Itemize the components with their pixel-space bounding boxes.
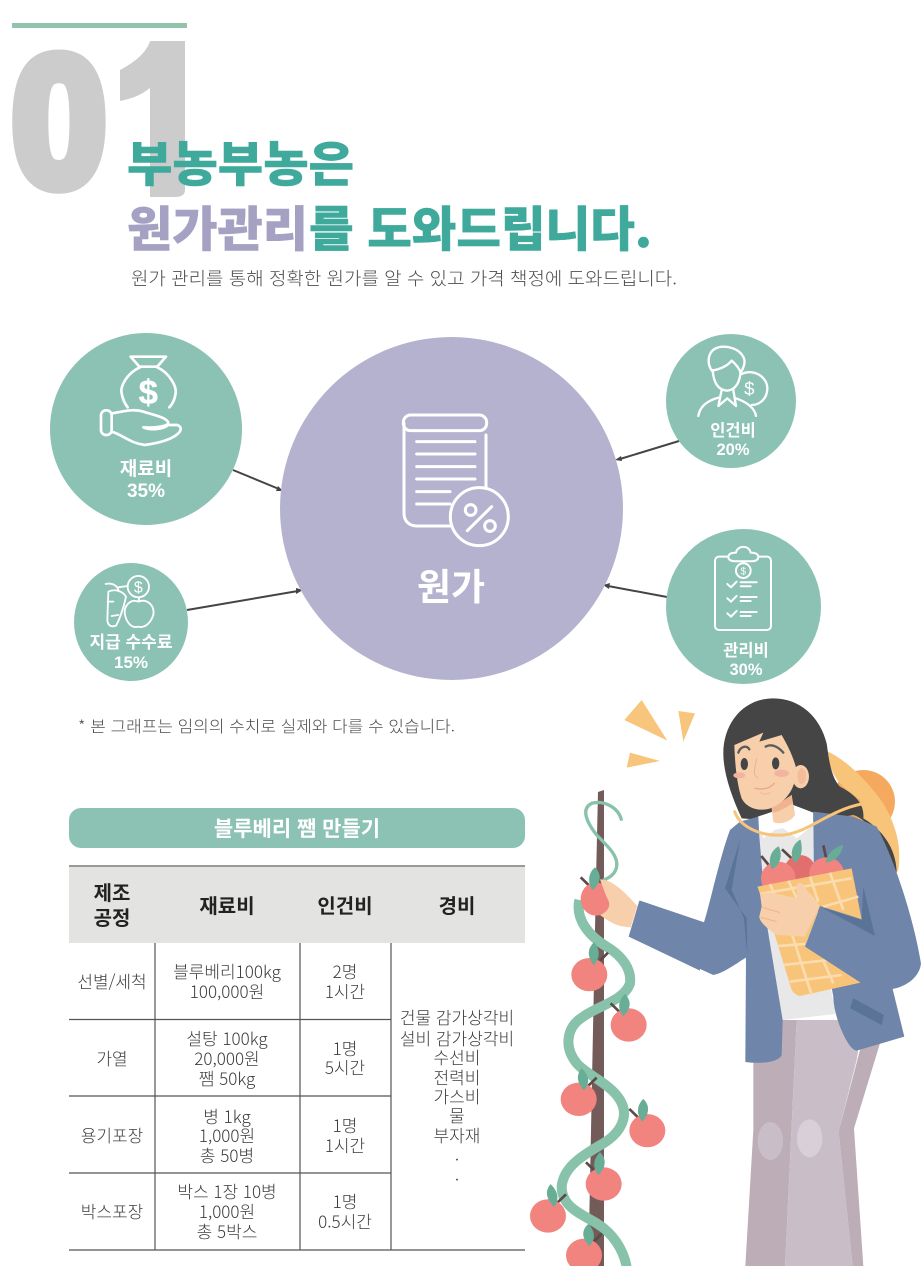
neck [772, 795, 795, 823]
apples [530, 868, 665, 1266]
shirt [759, 822, 835, 1020]
title: 원가관리 [127, 190, 308, 260]
subtitle: 원가 관리를 통해 정확한 원가를 알 수 있고 가격 책정에 도와드립니다. [131, 265, 677, 291]
label: material cost 35% [120, 458, 172, 502]
row: container packing: 총 50병 [200, 1142, 254, 1167]
row: container packing: 1,000원 [199, 1122, 255, 1147]
jacket [629, 812, 921, 1063]
label: labor cost 20%: 20% [716, 441, 750, 459]
hand on basket [759, 883, 819, 937]
column: overhead list: 수선비 [434, 1044, 480, 1069]
column: overhead list [400, 1004, 514, 1186]
hand on apple [600, 879, 700, 971]
panel: central cost circle [280, 337, 623, 680]
hat [827, 751, 899, 877]
table header: 인건비 [317, 890, 373, 919]
face [733, 733, 809, 810]
row: container packing: 용기포장 [81, 1122, 143, 1147]
label: payment fee 15%: 지급 수수료 [90, 633, 172, 652]
table heading bar: 블루베리 쨈 만들기 [214, 818, 380, 841]
label: management cost 30%: 30% [729, 661, 763, 679]
label: material cost 35%: 35% [127, 481, 165, 502]
label: labor cost 20%: 인건비 [710, 421, 756, 440]
section number 01 [12, 41, 185, 197]
necklace cord [735, 804, 862, 835]
section number 01: 1 [109, 10, 220, 233]
column: overhead list: . [455, 1141, 459, 1166]
table heading bar [69, 808, 525, 848]
label: labor cost 20% [710, 421, 756, 459]
table header: 재료비 [199, 890, 255, 919]
label: management cost 30%: 관리비 [723, 641, 769, 660]
row: sorting: 블루베리100kg [173, 958, 282, 983]
panel: payment fee [74, 563, 188, 681]
column: overhead list: 전력비 [434, 1064, 480, 1089]
table header: 제조 [94, 877, 130, 906]
row: heating: 가열 [96, 1045, 128, 1070]
row: sorting: 선별/세척 [77, 968, 147, 993]
label: management cost 30% [723, 641, 769, 679]
row: container packing: 병 1kg [203, 1103, 251, 1128]
icon: money bag on hand [101, 357, 181, 445]
row: sorting: 1시간 [325, 978, 365, 1003]
panel: material cost [50, 333, 242, 525]
illustration: apple vine [530, 790, 665, 1266]
icon: carrot and apple: $ [134, 579, 143, 596]
title: 를 도와드립니다. [309, 190, 652, 260]
row: heating: 쨈 50kg [199, 1065, 256, 1090]
vine [562, 802, 630, 1266]
row: container packing [81, 1103, 365, 1167]
icon: document with percent [403, 415, 508, 546]
row: box packing: 박스포장 [81, 1198, 143, 1223]
label: material cost 35%: 재료비 [120, 458, 172, 480]
label: payment fee 15%: 15% [114, 653, 148, 672]
arrows [187, 441, 679, 610]
table header [69, 865, 525, 943]
column: overhead list: 부자재 [434, 1122, 480, 1147]
apples in basket [761, 841, 844, 895]
row: heating: 설탕 100kg [186, 1025, 268, 1050]
row: box packing: 1,000원 [199, 1198, 255, 1223]
row: box packing: 0.5시간 [318, 1208, 372, 1233]
row: sorting [77, 958, 365, 1003]
row: box packing [81, 1178, 372, 1243]
section number 01: 0 [12, 20, 106, 225]
pants [745, 1020, 880, 1266]
title [127, 125, 652, 260]
row: box packing: 총 5박스 [197, 1218, 257, 1243]
row: sorting: 100,000원 [190, 978, 264, 1003]
table header: 경비 [439, 890, 475, 919]
row: container packing: 1명 [333, 1112, 357, 1137]
label: cost: 원가 [417, 567, 485, 608]
column: overhead list: 물 [449, 1102, 465, 1127]
section number bar [12, 23, 187, 28]
row: box packing: 박스 1장 10병 [177, 1178, 277, 1203]
icon: clipboard [715, 547, 771, 630]
row: box packing: 1명 [333, 1188, 357, 1213]
label: payment fee 15% [90, 633, 172, 672]
column: overhead list: 건물 감가상각비 [400, 1004, 514, 1029]
cost table [69, 865, 525, 1250]
footnote: * 본 그래프는 임의의 수치로 실제와 다를 수 있습니다. [78, 713, 455, 737]
collar [758, 805, 813, 838]
row: container packing: 1시간 [325, 1132, 365, 1157]
row: sorting: 2명 [333, 958, 357, 983]
row: heating [96, 1025, 365, 1090]
column: overhead list: 가스비 [434, 1083, 480, 1108]
sparkles [624, 700, 695, 768]
panel: management cost [666, 529, 821, 684]
row: heating: 1명 [333, 1035, 357, 1060]
table header: 공정 [94, 902, 130, 931]
title: 부농부농은 [127, 125, 354, 195]
column: overhead list: 설비 감가상각비 [400, 1025, 514, 1050]
panel: labor cost [666, 334, 796, 468]
column: overhead list: . [455, 1161, 459, 1186]
illustration: woman with basket [600, 698, 921, 1266]
icon: clipboard: $ [741, 566, 747, 577]
icon: money bag on hand: $ [139, 374, 158, 412]
basket [757, 868, 862, 996]
row: heating: 5시간 [325, 1054, 365, 1079]
arm and sleeve over basket [725, 840, 920, 1025]
row: heating: 20,000원 [194, 1045, 260, 1070]
icon: person and coin: $ [744, 378, 755, 399]
pole [588, 790, 604, 1266]
hair [723, 698, 897, 873]
